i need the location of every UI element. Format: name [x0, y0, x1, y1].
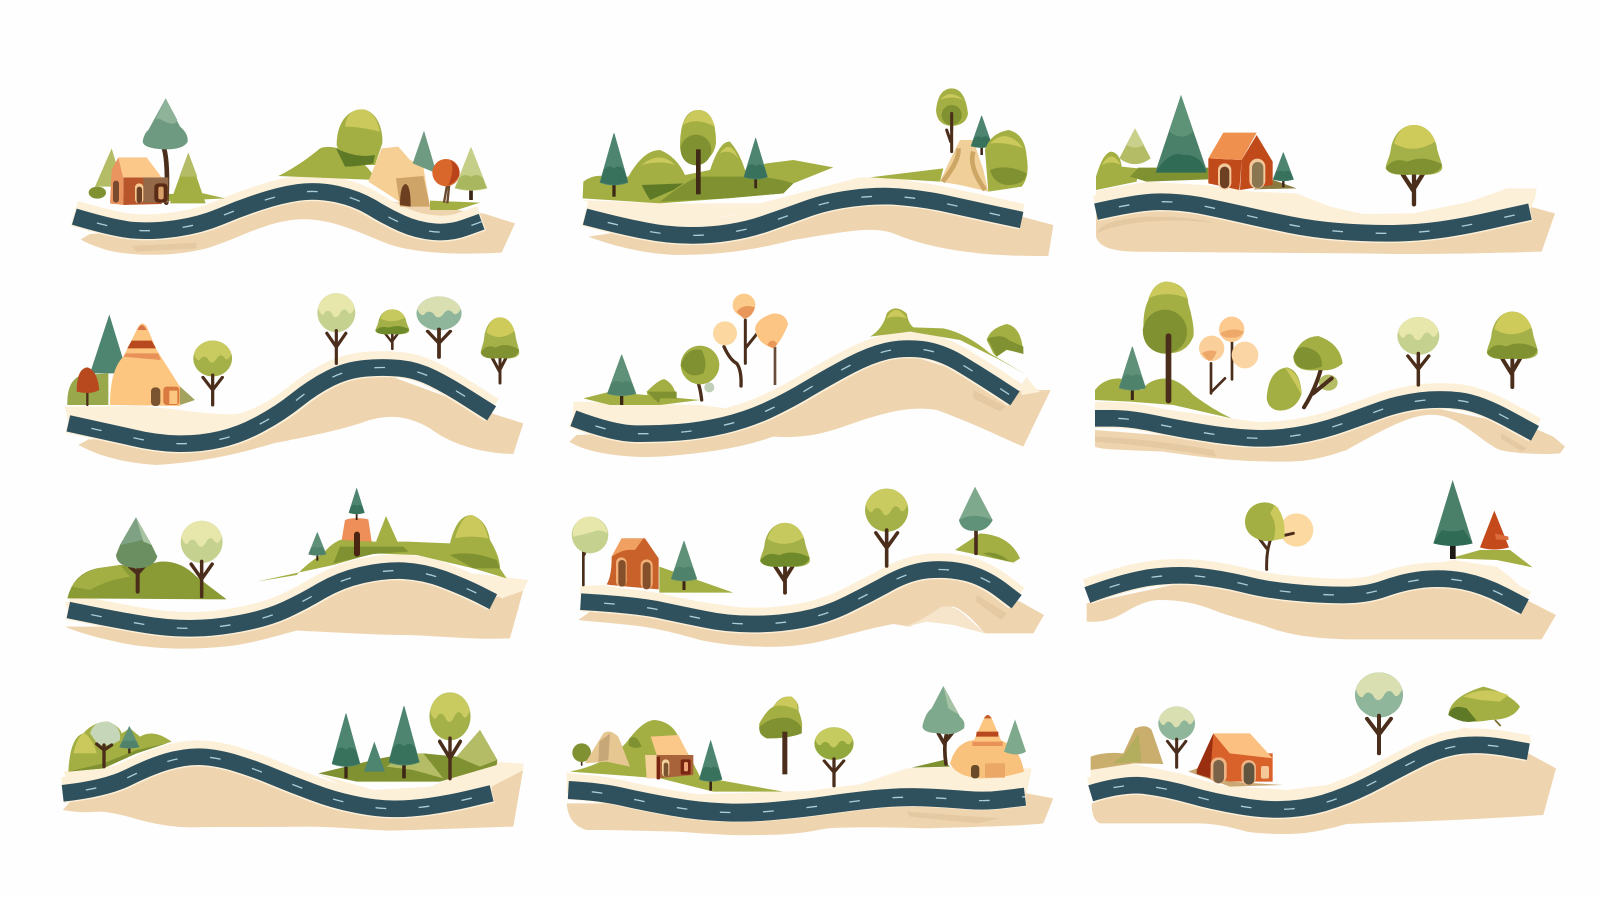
tree: red: [77, 367, 99, 405]
shoulder wedge: [65, 573, 528, 625]
shoulder wedge: [1095, 402, 1320, 433]
shoulder wedge: [583, 177, 1023, 227]
panel: road scene 9: [572, 487, 1044, 647]
shoulder wedge: [573, 377, 1051, 430]
tree: mint: [1158, 706, 1195, 767]
road: [581, 570, 1017, 624]
ground: [659, 567, 733, 593]
ground: house: [1188, 768, 1283, 787]
pine: [1433, 480, 1473, 559]
pine: [744, 138, 767, 188]
panel: road scene 4: [569, 294, 1051, 457]
panel: road scene 10: [567, 686, 1053, 835]
road shoulder: [68, 567, 493, 625]
pine: [971, 116, 992, 155]
road dashes: [1095, 399, 1535, 438]
hill: left: [67, 562, 227, 599]
sand base: [588, 197, 1053, 256]
house: [1208, 133, 1297, 190]
tree: tall: [680, 110, 716, 194]
tree: sage: [922, 686, 964, 764]
panel: road scene 6: [1095, 282, 1565, 462]
tree: mint: [1355, 672, 1403, 753]
sand shadow: [1095, 433, 1527, 457]
pine: small: [309, 532, 326, 561]
sand base: [569, 350, 1051, 457]
pine: [332, 714, 360, 778]
road shoulder: [585, 193, 1022, 232]
ground strip: [1130, 168, 1208, 182]
ground: right: [912, 760, 950, 768]
sand base: [78, 370, 523, 465]
road shoulder: [568, 787, 1025, 809]
pine: [699, 741, 722, 791]
pine: no trunk: [364, 742, 385, 772]
ground: [583, 392, 700, 405]
house: [110, 157, 168, 205]
road dashes: [568, 790, 1025, 813]
shoulder wedge: [65, 390, 287, 440]
shoulder wedge: [1373, 560, 1528, 595]
tree: tall: [759, 696, 802, 774]
sand shadow: [132, 243, 197, 252]
hut: [110, 323, 180, 406]
bush: [647, 379, 677, 403]
ground: hut: [178, 385, 195, 405]
tree: sage: [143, 98, 188, 203]
bush: left: [1096, 152, 1138, 190]
tree: orange right: [1219, 317, 1258, 379]
sand base: [63, 760, 523, 831]
road shoulder: [1087, 572, 1525, 603]
road: [568, 790, 1025, 813]
road dashes: [68, 367, 492, 444]
tree: small bell: [375, 309, 409, 349]
road dashes: [63, 757, 492, 809]
sand shadow: [976, 595, 1007, 620]
tree: bell: [1487, 312, 1538, 387]
pine: pale: [1119, 128, 1151, 164]
road dashes: [68, 571, 493, 628]
sand base: [1096, 203, 1555, 254]
hill: right: [257, 515, 507, 582]
pine: [413, 131, 437, 173]
road dashes: [1087, 575, 1525, 607]
shoulder wedge: [1096, 182, 1537, 230]
bush: [67, 373, 108, 405]
shoulder wedge: [580, 585, 760, 620]
pine: pale left: [95, 148, 123, 187]
sand shadow: [907, 812, 1000, 823]
hut: [950, 715, 1024, 778]
sand shadow: [973, 390, 1005, 412]
ground: [1450, 550, 1533, 567]
road: [1096, 202, 1530, 233]
bush: [987, 324, 1023, 357]
sand base: [1095, 403, 1565, 462]
sand base: [81, 192, 515, 255]
road dashes: [573, 349, 1015, 434]
hill: [870, 308, 1027, 375]
ground: right: [870, 168, 943, 182]
tree: sage: [959, 487, 993, 553]
tree: pale: [572, 517, 608, 585]
shoulder wedge: [567, 767, 1032, 813]
tree: tall: [1143, 282, 1194, 403]
road shoulder: [63, 753, 492, 805]
pine: light right: [170, 153, 206, 203]
house: [645, 735, 693, 779]
hut: [342, 518, 372, 542]
rock: [940, 140, 988, 192]
sand base: [1092, 747, 1556, 834]
tree: [865, 489, 908, 566]
road dashes: [585, 196, 1022, 235]
road shoulder: [1095, 396, 1535, 435]
tree: two crowns: [1245, 502, 1313, 569]
ground: left: [112, 193, 225, 204]
ground: right: [318, 730, 497, 782]
road: [68, 367, 492, 444]
pine: small: [120, 726, 139, 753]
panel: road scene 1: [74, 98, 515, 255]
tree: [429, 692, 471, 778]
pine: sage small: [1004, 719, 1026, 754]
panel: road scene 11: [1087, 480, 1556, 639]
bush: [1267, 367, 1302, 411]
panel: road scene 3: [583, 88, 1053, 256]
sand base: [65, 573, 523, 649]
road shoulder: [1096, 198, 1530, 230]
hills: left: [583, 142, 833, 203]
house: [607, 538, 659, 589]
panel: road scene 2: [65, 293, 523, 465]
hut door: [354, 532, 360, 557]
road dashes: [1091, 745, 1528, 809]
pine: small: [1273, 153, 1293, 187]
tree: [193, 340, 232, 405]
tree: bell: [481, 317, 519, 383]
shoulder wedge: [1091, 727, 1532, 803]
pine: red: [1480, 511, 1509, 549]
tree: [936, 88, 968, 152]
road dashes: [581, 570, 1017, 624]
hill with bush: [278, 109, 382, 180]
tree: leaning: [1293, 336, 1343, 407]
hill: left: [68, 722, 172, 772]
road: [68, 571, 493, 628]
tree: sage: [116, 517, 157, 592]
road shoulder: [573, 345, 1015, 430]
road shoulder: [581, 566, 1017, 621]
ground: right: [955, 533, 1020, 563]
shoulder wedge: [63, 762, 523, 800]
pine: pale: [455, 148, 487, 200]
pine: [600, 134, 628, 197]
ground: right: [430, 201, 480, 210]
hill: [570, 720, 783, 792]
sand base: [1087, 583, 1556, 639]
tree: bell: [1386, 125, 1442, 204]
road dashes: [1096, 202, 1530, 233]
tree: orange left: [713, 321, 741, 386]
pale sand notch: [903, 606, 985, 633]
tree: mint: [90, 722, 120, 767]
rock: [1091, 726, 1163, 770]
tree: bell: [760, 523, 810, 593]
tree: mint: [416, 296, 462, 357]
panel: road scene 7: [65, 488, 528, 649]
road: [1087, 575, 1525, 607]
bush: dark: [89, 187, 106, 199]
sand shadow: [1097, 217, 1215, 233]
tree: pale: [1397, 317, 1439, 385]
pine: [608, 355, 636, 405]
road shoulder: [1091, 741, 1528, 806]
road: [1095, 399, 1535, 438]
road: [74, 191, 482, 232]
road: [1091, 745, 1528, 809]
sand base: [567, 793, 1053, 835]
panel: road scene 5: [1096, 95, 1555, 254]
pine: [671, 541, 697, 590]
panel: road scene 12: [1091, 672, 1556, 834]
road: [573, 349, 1015, 434]
tree: [681, 346, 719, 400]
hill: [1095, 378, 1232, 418]
pine: tower: [349, 488, 364, 520]
road: [585, 196, 1022, 235]
tree: [814, 727, 854, 786]
tree: red: [432, 159, 460, 203]
tree: small: [572, 743, 591, 765]
road shoulder: [68, 364, 492, 440]
panel: road scene 8: [63, 692, 523, 831]
pine: [1119, 347, 1145, 400]
pine: pale: [376, 516, 398, 543]
road: [63, 757, 492, 809]
rock: [585, 731, 630, 767]
sand base: [578, 570, 1044, 647]
bush: [1448, 687, 1520, 726]
pine: large: [1156, 95, 1207, 173]
tree: orange mid: [733, 294, 757, 363]
tree: pale: [317, 293, 355, 363]
pine: dark: [90, 314, 127, 373]
bush: [985, 130, 1028, 192]
rock house: [368, 147, 430, 207]
tree: orange right: [755, 313, 788, 385]
tree: orange left: [1199, 336, 1225, 393]
house: [1197, 733, 1273, 785]
road shoulder: [74, 188, 482, 229]
pine: [389, 707, 419, 778]
tree: pale: [181, 521, 223, 597]
road dashes: [74, 191, 482, 232]
